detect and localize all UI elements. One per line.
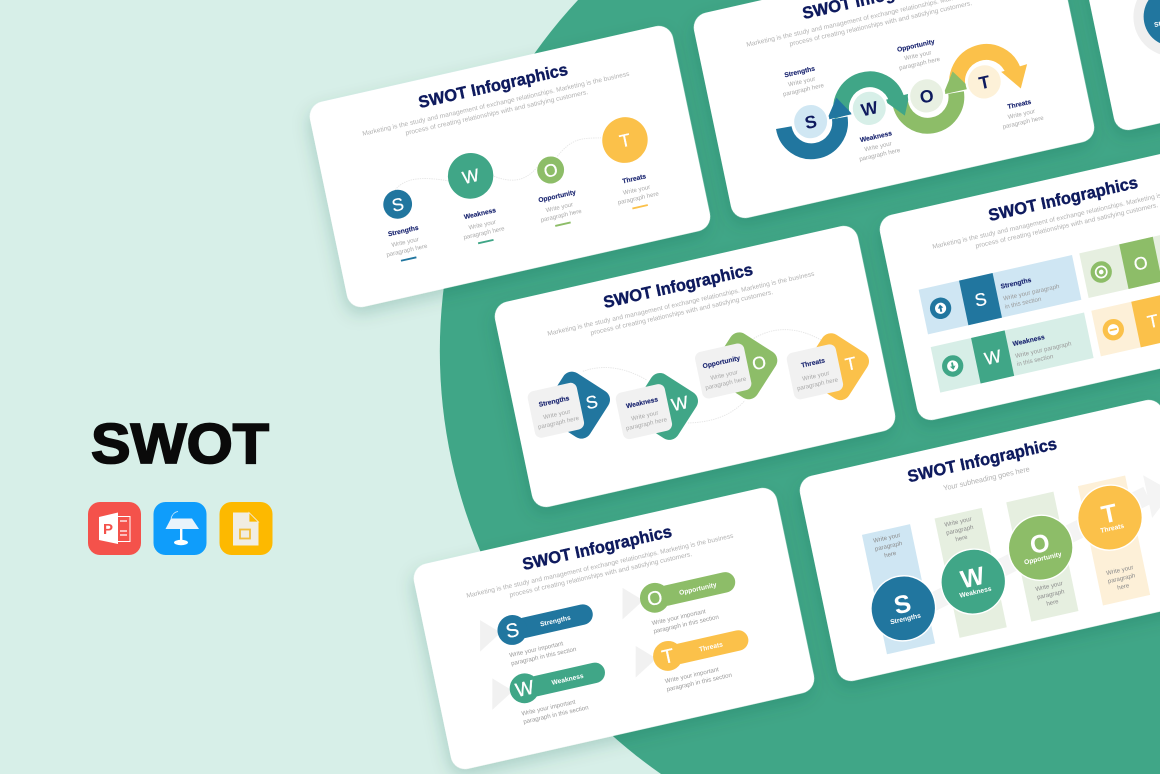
item: Threats: paragraph in this section [666, 672, 733, 693]
column: Opportunity: Write your [1035, 580, 1063, 593]
slide description: process of creating relationships with and satisfying customers. [405, 89, 589, 137]
item: Threats: paragraph here [617, 190, 660, 206]
item: Strengths: paragraph here [386, 243, 429, 259]
row: Strengths: Write your paragraph [1003, 283, 1061, 303]
item: Threats [598, 113, 661, 213]
column: Threats [1078, 475, 1150, 605]
slide description: process of creating relationships with and satisfying customers. [975, 202, 1159, 250]
card: far top right (partial) [1074, 0, 1160, 133]
icon: PowerPoint: P [103, 521, 113, 538]
column: Threats: Write your [1106, 564, 1134, 577]
item: Threats: T [660, 645, 676, 669]
row: Weakness: W [983, 346, 1003, 369]
letter circle: S [790, 100, 832, 143]
item: Weakness: W [461, 165, 481, 188]
item: Opportunity: O [645, 586, 665, 611]
column: Opportunity: here [1046, 598, 1060, 608]
row: Strengths [919, 255, 1081, 334]
letter circle: T: T [977, 71, 992, 93]
slide description: process of creating relationships with and satisfying customers. [509, 551, 693, 599]
circle: Weakness: W [958, 562, 987, 594]
letter circle: O [906, 75, 948, 117]
dotted connector path [393, 135, 606, 207]
item: Threats: paragraph here [796, 376, 839, 393]
row: Opportunity [1079, 219, 1160, 298]
item: Opportunity [616, 563, 742, 641]
main title: SWOT: SWOT [91, 412, 269, 476]
letter circle: T [963, 61, 1005, 103]
arrow: green [896, 68, 976, 131]
row: Strengths: in this section [1004, 296, 1043, 311]
item: Opportunity: paragraph in this section [653, 614, 720, 635]
text: Strengths: Strengths [784, 65, 816, 79]
item: Threats: Threats [622, 173, 647, 185]
item: Strengths: S [584, 391, 600, 413]
slide description: Marketing is the study and management of exchange relationships. Marketing is the business [547, 270, 816, 338]
circle: Strengths [865, 569, 942, 647]
item: Strengths: Strengths [540, 615, 572, 628]
item: Opportunity: O [542, 159, 560, 182]
item: Strengths: Strengths [538, 395, 570, 409]
arrow: teal [836, 71, 914, 129]
text: Opportunity [895, 38, 941, 72]
item: Strengths: paragraph here [537, 415, 580, 431]
slide title: SWOT Infographics [987, 173, 1139, 225]
letter circle: S: S [803, 111, 819, 133]
text: Threats: Write your [1007, 108, 1036, 121]
letter circle: W [848, 87, 890, 130]
text: Opportunity: Opportunity [897, 38, 936, 54]
slide description: Marketing is the study and management of exchange relationships. Marketing is the business [466, 532, 735, 600]
column: Weakness: paragraph [946, 524, 975, 537]
icon: PowerPoint [88, 502, 141, 555]
text: Opportunity: paragraph here [899, 56, 941, 72]
column: Opportunity: paragraph [1036, 588, 1066, 601]
item: Weakness: paragraph here [625, 416, 668, 432]
item: Strengths: Strengths [387, 225, 420, 238]
circle: Opportunity: O [1028, 528, 1052, 560]
item: Threats: Threats [699, 641, 724, 654]
card: banded rows [877, 136, 1160, 423]
item: Weakness: Write your [468, 219, 497, 232]
item: Weakness: W [670, 392, 690, 415]
row: Opportunity: O [1132, 252, 1150, 275]
letter circle: O: O [918, 85, 936, 108]
slide background [492, 223, 898, 510]
item: Strengths: Write your [543, 408, 571, 421]
circle: Opportunity: Opportunity [1024, 551, 1063, 566]
circle: Threats [1072, 479, 1148, 556]
text: Strengths: Write your [788, 76, 816, 88]
slide title: SWOT Infographics [602, 260, 754, 312]
circle: Opportunity [1002, 509, 1079, 587]
text: Threats: Threats [1007, 99, 1032, 111]
item: Weakness [444, 148, 507, 248]
item: Strengths: S [504, 619, 521, 643]
slide background [691, 0, 1097, 221]
circle: Strengths: S [892, 589, 914, 620]
arrow: blue [780, 95, 858, 157]
arrow: yellow [952, 43, 1032, 102]
slide title: SWOT Infographics [521, 522, 673, 574]
row: Strengths: Strengths [1000, 277, 1032, 291]
item: Opportunity: Opportunity [538, 189, 577, 204]
faint background arrow [903, 470, 1160, 609]
circle: Weakness: Weakness [959, 586, 992, 600]
slide title: SWOT Infographics [417, 60, 569, 112]
text: Weakness: paragraph here [859, 147, 902, 163]
column: Strengths: here [884, 550, 898, 559]
item: Threats: T [618, 130, 633, 152]
slide background [797, 397, 1160, 684]
text: Threats: paragraph here [1002, 114, 1045, 131]
item: Opportunity [691, 320, 789, 413]
large green circle [440, 0, 1160, 774]
item: Strengths [474, 595, 600, 674]
item: Threats: Write your important [664, 666, 720, 685]
card: diamonds [492, 223, 898, 510]
card: wave arrows [691, 0, 1097, 221]
item: Weakness: Weakness [551, 673, 585, 687]
item: Opportunity: paragraph here [705, 375, 748, 392]
item: Opportunity: Write your important [651, 608, 707, 627]
column: Weakness [935, 508, 1007, 638]
circle: Weakness [935, 543, 1011, 620]
item: Threats: Threats [801, 357, 826, 370]
card: pills [411, 485, 817, 772]
slide background [411, 485, 817, 772]
column: Threats: paragraph [1107, 572, 1136, 585]
letter circle: W: W [859, 97, 880, 120]
row: Weakness: Weakness [1012, 334, 1046, 348]
card: curved path with circles [307, 23, 713, 310]
text: Strengths: paragraph here [782, 82, 825, 98]
column: Strengths: paragraph [874, 540, 904, 553]
item: Weakness: W [513, 676, 537, 702]
item: Strengths [523, 359, 622, 453]
item: Opportunity: O [750, 352, 768, 374]
circle: Threats: T [1099, 499, 1120, 530]
column: Opportunity [1006, 492, 1078, 622]
dotted connector path [583, 318, 833, 446]
item: Threats: T [843, 353, 858, 375]
item: Threats [782, 321, 881, 414]
item: Threats [629, 621, 756, 699]
circle: Threats: Threats [1100, 523, 1125, 535]
column: Weakness: here [955, 534, 969, 543]
item: Threats: Write your [622, 184, 651, 197]
column: Threats: here [1117, 582, 1131, 592]
item: Opportunity: paragraph here [540, 208, 583, 224]
slide description: process of creating relationships with and satisfying customers. [789, 0, 973, 48]
row: Weakness: in this section [1016, 353, 1055, 368]
text: Threats [998, 97, 1045, 131]
icon: Google Slides [220, 502, 272, 555]
item: Strengths [374, 186, 430, 265]
column: Strengths [862, 524, 935, 654]
item: Weakness: Write your important [521, 698, 576, 718]
item: Opportunity: Opportunity [702, 355, 741, 370]
row: Weakness: Write your paragraph [1015, 340, 1073, 360]
item: Weakness: Write your [631, 410, 659, 423]
row: Threats: T [1146, 310, 1160, 332]
item: Weakness: Weakness [463, 207, 497, 221]
text: Weakness: Write your [864, 140, 892, 153]
item: Weakness: paragraph here [463, 225, 506, 241]
column: Weakness: Write your [944, 516, 972, 529]
item: Weakness: Weakness [626, 396, 659, 410]
text: Weakness [855, 129, 902, 163]
slide title: SWOT Infographics [906, 434, 1059, 486]
item: Strengths: S [390, 194, 406, 216]
item: Strengths: paragraph in this section [510, 646, 578, 667]
circle: Strengths: Strengths [890, 612, 922, 626]
slide background [877, 136, 1160, 423]
item: Strengths: Write your important [509, 640, 564, 659]
item: Weakness: paragraph in this section [523, 704, 590, 726]
text: Strengths [779, 64, 825, 98]
text: Opportunity: Write your [904, 49, 932, 62]
item: Threats: Write your [802, 370, 830, 383]
item: Opportunity: Write your [545, 201, 574, 214]
text: Weakness: Weakness [859, 130, 893, 144]
row: Threats [1091, 276, 1160, 356]
item: Opportunity [528, 152, 584, 230]
icon: Keynote [154, 502, 206, 555]
row: Strengths: S [973, 289, 988, 311]
slide description: process of creating relationships with and satisfying customers. [590, 289, 774, 337]
slide subheading: Your subheading goes here [942, 464, 1031, 493]
item: Opportunity: Write your [710, 369, 738, 382]
item: Weakness [486, 654, 612, 732]
item: Opportunity: Opportunity [679, 582, 718, 597]
partial circle: Strengths [1126, 0, 1160, 64]
item: Strengths: Write your [391, 236, 419, 249]
slide description: Marketing is the study and management of exchange relationships. Marketing is the business [362, 70, 631, 138]
column: Strengths: Write your [873, 532, 901, 545]
slide background [307, 23, 713, 310]
item: Weakness [611, 361, 710, 454]
card: ascending circles [797, 397, 1160, 684]
slide background [1074, 0, 1160, 133]
row: Weakness [931, 312, 1094, 393]
